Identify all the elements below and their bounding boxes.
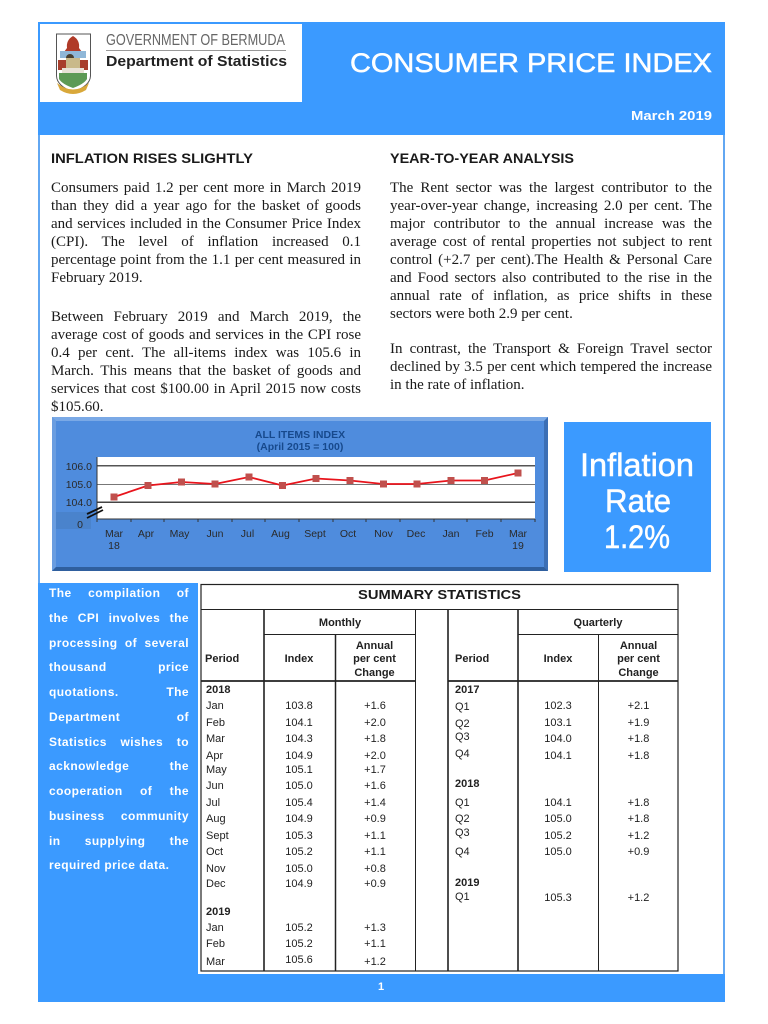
page number: 1 (378, 981, 384, 993)
monthly period column: Dec (206, 878, 226, 890)
table column headers (205, 617, 660, 679)
inflation rate callout: 1.2% (604, 519, 670, 555)
right column paragraph 2: declined by 3.5 per cent which tempered the increase (390, 359, 712, 375)
inflation rate callout: Rate (605, 483, 671, 519)
table column headers: per cent (617, 653, 660, 665)
quarterly annual change column: +1.8 (628, 733, 649, 745)
table column headers: Index (544, 653, 573, 665)
monthly annual change column: +1.3 (364, 922, 386, 934)
quarterly annual change column (628, 700, 649, 904)
quarterly index column: 104.1 (544, 750, 572, 762)
x axis labels: Aug (271, 528, 290, 540)
sidebar note: processing of several (49, 636, 189, 650)
x axis labels: May (170, 528, 190, 540)
monthly period column: 2018 (206, 684, 230, 696)
chart: all items index: (April 2015 = 100) (257, 441, 343, 453)
monthly annual change column: +1.1 (364, 846, 386, 858)
monthly annual change column: +1.8 (364, 733, 386, 745)
quarterly period column: Q3 (455, 827, 470, 839)
logo panel (40, 24, 302, 102)
monthly index column: 104.9 (285, 750, 313, 762)
monthly index column: 105.2 (285, 922, 313, 934)
left column paragraph 1: and services included in the Consumer Price Index (51, 216, 361, 232)
left column paragraph 2: services that cost $100.00 in April 2015 now costs (51, 381, 361, 397)
date: March 2019 (631, 108, 712, 123)
monthly index column: 104.9 (285, 813, 313, 825)
monthly index column: 105.6 (285, 954, 313, 966)
monthly index column: 105.4 (285, 797, 313, 809)
sidebar note: the CPI involves the (49, 611, 189, 625)
left column paragraph 1: percentage point from the 1.1 per cent measured in (51, 252, 361, 268)
monthly annual change column: +1.1 (364, 938, 386, 950)
y axis labels (66, 461, 92, 531)
sidebar note (49, 586, 189, 872)
quarterly index column: 105.2 (544, 830, 572, 842)
right column paragraph 1: and Food sectors also contributed to the rise in the (390, 270, 712, 286)
quarterly annual change column: +1.2 (628, 830, 649, 842)
left column paragraph 1: February 2019. (51, 270, 143, 286)
right column paragraph 2: in the rate of inflation. (390, 377, 525, 393)
x axis labels: Jan (443, 528, 460, 540)
y axis labels: 106.0 (66, 461, 92, 473)
quarterly annual change column: +1.8 (628, 797, 649, 809)
table column headers: Change (618, 667, 659, 679)
table column headers: Index (285, 653, 314, 665)
left column paragraph 2: March. This means that the basket of goods and (51, 363, 361, 379)
left column paragraph 2: Between February 2019 and March 2019, the (51, 309, 361, 325)
quarterly period column: Q4 (455, 748, 470, 760)
monthly index column: 104.9 (285, 878, 313, 890)
table column headers: Period (455, 653, 489, 665)
y axis labels: 0 (77, 519, 83, 531)
table column headers: Monthly (319, 617, 362, 629)
left column paragraph 2: 0.4 per cent. The all-items index was 105.6 in (51, 345, 361, 361)
quarterly period column: 2018 (455, 778, 479, 790)
inflation rate callout: Inflation (580, 447, 694, 483)
x axis labels: Sept (304, 528, 326, 540)
inflation rate callout (580, 447, 694, 555)
quarterly annual change column: +1.8 (628, 750, 649, 762)
monthly index column: 105.0 (285, 863, 313, 875)
monthly period column: Jun (206, 780, 224, 792)
monthly period column: Mar (206, 956, 225, 968)
x axis labels: Nov (374, 528, 394, 540)
left column paragraph 2 (51, 309, 361, 415)
table column headers: Period (205, 653, 239, 665)
quarterly annual change column: +1.9 (628, 717, 649, 729)
quarterly index column: 104.0 (544, 733, 572, 745)
footer band (38, 974, 725, 1002)
x axis labels: Oct (340, 528, 356, 540)
right column paragraph 1: average cost of rental properties not subject to rent (390, 234, 712, 250)
right column paragraph 2: In contrast, the Transport & Foreign Travel sector (390, 341, 712, 357)
logo divider (106, 50, 286, 51)
quarterly annual change column: +0.9 (628, 846, 649, 858)
monthly period column: Jan (206, 700, 224, 712)
y axis labels: 105.0 (66, 479, 92, 491)
monthly index column: 103.8 (285, 700, 313, 712)
summary statistics table (201, 584, 678, 971)
monthly annual change column: +1.4 (364, 797, 386, 809)
left column paragraph 2: $105.60. (51, 399, 104, 415)
monthly annual change column: +0.8 (364, 863, 386, 875)
quarterly annual change column: +2.1 (628, 700, 649, 712)
monthly annual change column: +0.9 (364, 813, 386, 825)
sidebar note: Statistics wishes to (49, 734, 189, 748)
monthly period column: Feb (206, 938, 225, 950)
sidebar note: cooperation of the (49, 784, 189, 798)
monthly index column: 105.2 (285, 846, 313, 858)
monthly annual change column: +2.0 (364, 717, 386, 729)
monthly period column: Jan (206, 922, 224, 934)
monthly index column (285, 700, 313, 966)
monthly annual change column (364, 700, 386, 968)
monthly period column: May (206, 764, 227, 776)
x axis labels: Jun (207, 528, 224, 540)
right column paragraph 1 (390, 180, 712, 322)
right column paragraph 1: major contributor to the annual increase was the (390, 216, 712, 232)
left column paragraph 1: than they did a year ago for the basket of goods (51, 198, 361, 214)
monthly index column: 105.2 (285, 938, 313, 950)
quarterly period column (455, 684, 479, 903)
x axis labels: Mar (509, 528, 528, 540)
quarterly index column: 105.0 (544, 846, 572, 858)
monthly index column: 105.0 (285, 780, 313, 792)
quarterly period column: Q1 (455, 797, 470, 809)
sidebar note: Department of (49, 710, 189, 724)
table column headers: Quarterly (574, 617, 623, 629)
plot area (97, 457, 535, 519)
monthly annual change column: +1.6 (364, 780, 386, 792)
quarterly period column: Q1 (455, 891, 470, 903)
monthly index column: 105.3 (285, 830, 313, 842)
monthly index column: 104.1 (285, 717, 313, 729)
right column paragraph 1: year-over-year change, increasing 2.0 per cent. The (390, 198, 712, 214)
monthly annual change column: +1.6 (364, 700, 386, 712)
left column paragraph 1: (CPI). The level of inflation increased 0.1 (51, 234, 361, 250)
monthly annual change column: +1.7 (364, 764, 386, 776)
logo: government of Bermuda: GOVERNMENT OF BERMUDA (106, 32, 285, 49)
axis break mark (87, 507, 103, 518)
table column headers: Annual (620, 640, 657, 652)
quarterly period column: 2019 (455, 877, 479, 889)
quarterly annual change column: +1.2 (628, 892, 649, 904)
x axis labels: Apr (138, 528, 155, 540)
monthly period column: Oct (206, 846, 223, 858)
right column paragraph 1: annual rate of inflation, as price shifts in these (390, 288, 712, 304)
right column paragraph 2 (390, 341, 712, 393)
monthly annual change column: +0.9 (364, 878, 386, 890)
right column paragraph 1: sectors were both 2.9 per cent. (390, 306, 573, 322)
monthly annual change column: +1.2 (364, 956, 386, 968)
sidebar note: required price data. (49, 858, 169, 872)
quarterly index column: 103.1 (544, 717, 572, 729)
monthly period column: Sept (206, 830, 229, 842)
monthly period column: Jul (206, 797, 220, 809)
monthly annual change column: +2.0 (364, 750, 386, 762)
monthly period column: Apr (206, 750, 223, 762)
left column paragraph 1: Consumers paid 1.2 per cent more in March 2019 (51, 180, 361, 196)
monthly period column: Aug (206, 813, 226, 825)
y axis labels: 104.0 (66, 497, 92, 509)
heading: inflation rises slightly: INFLATION RISES SLIGHTLY (51, 151, 253, 166)
chart: all items index (52, 417, 548, 571)
heading: year-to-year analysis: YEAR-TO-YEAR ANALYSIS (390, 151, 574, 166)
quarterly period column: Q3 (455, 731, 470, 743)
left column paragraph 1 (51, 180, 361, 286)
header band (38, 22, 725, 135)
right column paragraph 1: control (+2.7 per cent).The Health & Personal Care (390, 252, 712, 268)
monthly period column: Feb (206, 717, 225, 729)
table column headers: Change (354, 667, 395, 679)
inflation rate panel (564, 422, 711, 572)
table column headers: per cent (353, 653, 396, 665)
title: CONSUMER PRICE INDEX (350, 48, 712, 78)
sidebar note: quotations. The (49, 685, 189, 699)
quarterly index column: 104.1 (544, 797, 572, 809)
quarterly period column: Q1 (455, 701, 470, 713)
logo: department of statistics: Department of Statistics (106, 53, 287, 70)
table title: SUMMARY STATISTICS (358, 587, 521, 602)
sidebar note: The compilation of (49, 586, 189, 600)
sidebar note: business community (49, 809, 189, 823)
chart title: ALL ITEMS INDEX (255, 429, 345, 441)
quarterly annual change column: +1.8 (628, 813, 649, 825)
monthly annual change column: +1.1 (364, 830, 386, 842)
quarterly period column: Q2 (455, 813, 470, 825)
quarterly index column: 105.0 (544, 813, 572, 825)
sidebar panel (38, 583, 198, 974)
x axis labels: Jul (241, 528, 254, 540)
quarterly index column: 102.3 (544, 700, 572, 712)
right column paragraph 1: The Rent sector was the largest contributor to the (390, 180, 712, 196)
monthly period column (206, 684, 230, 968)
data line (114, 473, 518, 497)
x axis labels: Feb (475, 528, 494, 540)
monthly index column: 105.1 (285, 764, 313, 776)
sidebar note: in supplying the (49, 834, 189, 848)
x axis labels: 19 (512, 540, 524, 552)
table column headers: Annual (356, 640, 393, 652)
x axis labels: 18 (108, 540, 120, 552)
icon: Bermuda coat of arms (56, 34, 90, 94)
monthly index column: 104.3 (285, 733, 313, 745)
data markers (110, 470, 522, 500)
monthly period column: 2019 (206, 906, 230, 918)
x axis labels: Mar (105, 528, 124, 540)
sidebar note: acknowledge the (49, 759, 189, 773)
x axis labels: Dec (407, 528, 425, 540)
monthly period column: Mar (206, 733, 225, 745)
x axis labels (105, 528, 528, 552)
quarterly index column: 105.3 (544, 892, 572, 904)
table rules (201, 584, 678, 971)
monthly period column: Nov (206, 863, 226, 875)
quarterly period column: 2017 (455, 684, 479, 696)
sidebar note: thousand price (49, 660, 189, 674)
left column paragraph 2: average cost of goods and services in the CPI rose (51, 327, 361, 343)
quarterly period column: Q4 (455, 846, 470, 858)
quarterly period column: Q2 (455, 718, 470, 730)
quarterly index column (544, 700, 572, 904)
